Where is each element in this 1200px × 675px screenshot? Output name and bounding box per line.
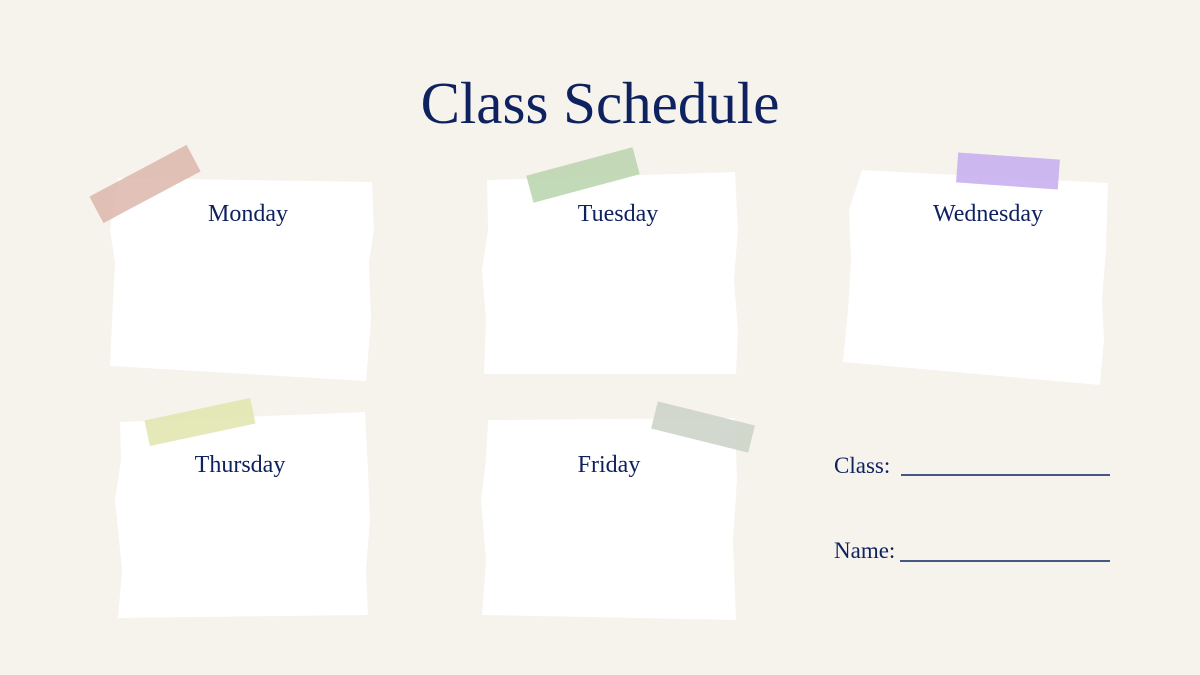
- heading: Friday: Friday: [578, 452, 640, 478]
- tape: pink: [89, 145, 201, 223]
- tape: yellow: [144, 398, 256, 446]
- heading: Wednesday: Wednesday: [933, 201, 1043, 227]
- heading: Thursday: Thursday: [195, 452, 285, 478]
- heading: Tuesday: Tuesday: [578, 201, 658, 227]
- form: name field: Name:: [834, 538, 895, 563]
- panel: Wednesday: [843, 152, 1108, 385]
- panel: Friday: [481, 401, 755, 620]
- form: class field: Class:: [834, 453, 890, 478]
- tape: sage: [651, 401, 755, 453]
- tape: purple: [956, 152, 1060, 190]
- panel: Monday: [89, 145, 374, 381]
- panel: Tuesday: [482, 147, 738, 374]
- panel: Thursday: [115, 398, 370, 618]
- title: Class Schedule: [421, 70, 779, 136]
- tape: green: [526, 147, 640, 203]
- heading: Monday: Monday: [208, 201, 288, 227]
